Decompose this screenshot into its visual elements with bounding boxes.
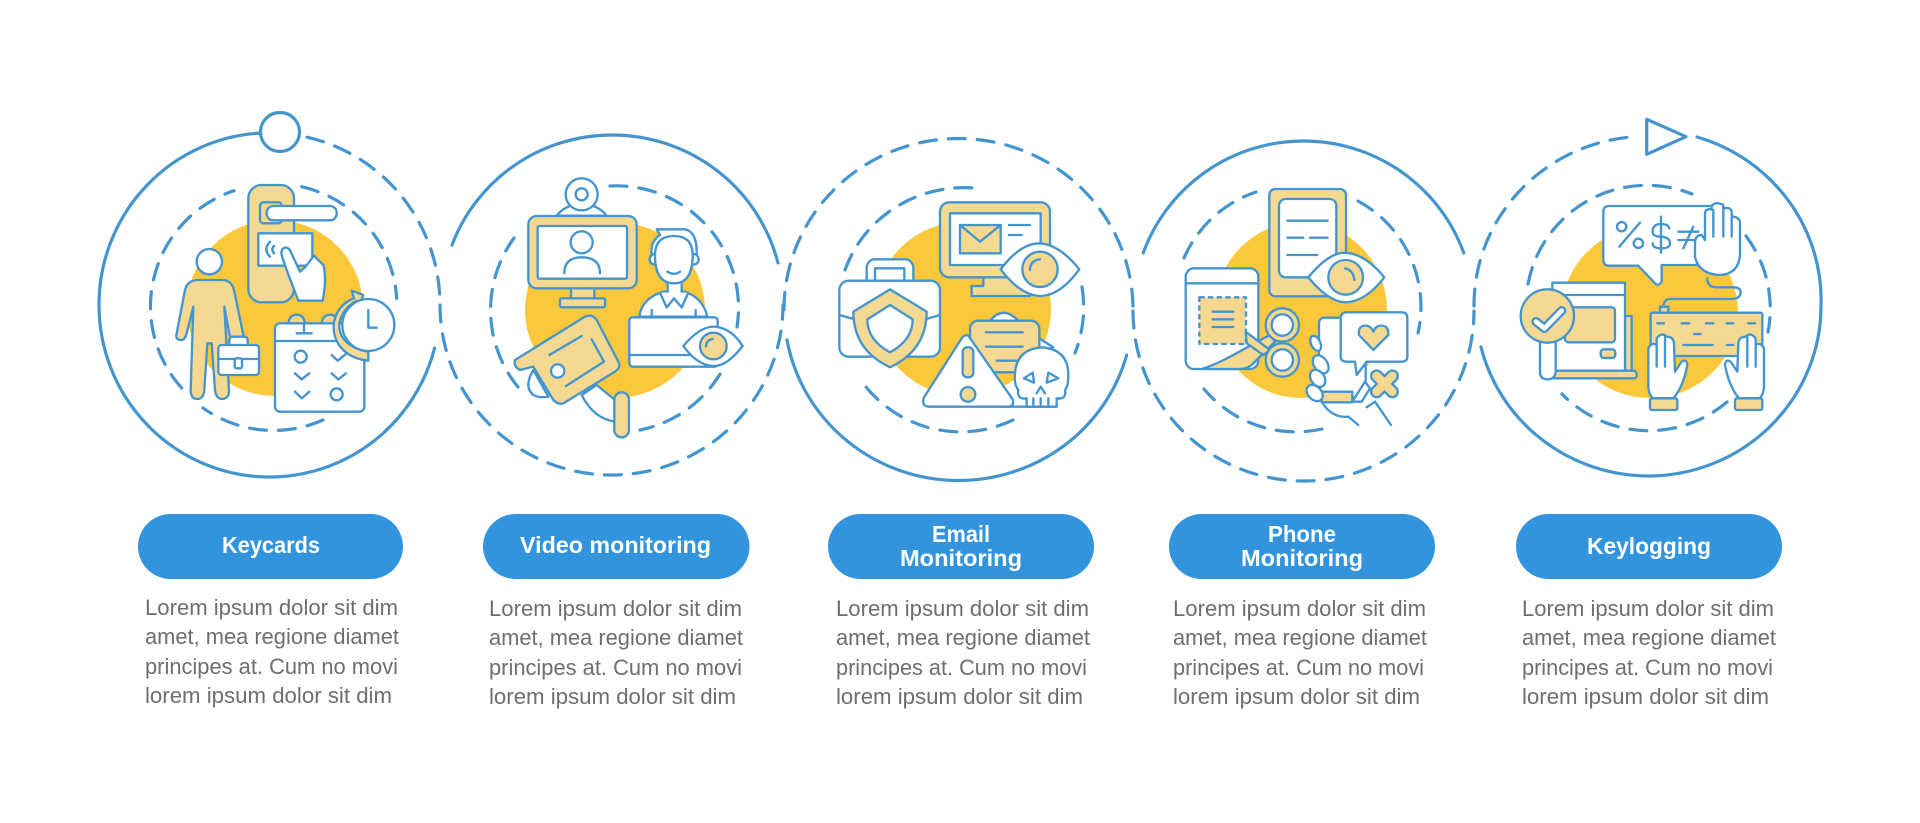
text block: amet, mea regione diamet: [1522, 625, 1776, 650]
door plate: [248, 185, 337, 302]
text block: principes at. Cum no movi: [489, 655, 742, 680]
outer ring: [1133, 141, 1474, 481]
laptop: [629, 317, 718, 367]
briefcase: [218, 337, 259, 375]
pill: Video monitoring: [483, 514, 750, 579]
verified badge: [1521, 289, 1574, 379]
text block: principes at. Cum no movi: [1173, 655, 1424, 680]
text block: principes at. Cum no movi: [145, 654, 398, 679]
text block: Lorem ipsum dolor sit dim: [1173, 596, 1426, 621]
text block: amet, mea regione diamet: [1173, 625, 1427, 650]
panel: Phone Monitoring: [1133, 141, 1474, 709]
security camera: [515, 316, 629, 437]
scissors: [1202, 308, 1299, 377]
inner dashed ring: [150, 187, 397, 430]
text block: amet, mea regione diamet: [489, 625, 743, 650]
cross flower: [1367, 376, 1392, 425]
hand holding phone: [1303, 318, 1370, 425]
document: [1186, 268, 1258, 369]
text block: lorem ipsum dolor sit dim: [1173, 684, 1420, 709]
text block: principes at. Cum no movi: [836, 655, 1087, 680]
briefcase with shield: [839, 259, 940, 367]
clock with arrow: [334, 291, 394, 361]
text block: amet, mea regione diamet: [145, 624, 399, 649]
webcam: [557, 178, 607, 216]
pill: Phone Monitoring: Monitoring: [1241, 545, 1363, 571]
raised hand: [1695, 203, 1740, 275]
icon: email, shield, warning: [839, 202, 1079, 407]
inner dashed ring: [491, 186, 739, 430]
outer ring: [440, 135, 783, 475]
calendar: [275, 315, 364, 412]
text block: Lorem ipsum dolor sit dim: [489, 596, 742, 621]
speech bubble with symbols: [1603, 206, 1717, 285]
panel: Email Monitoring: [784, 138, 1133, 709]
pill: Phone Monitoring: Phone: [1268, 521, 1336, 547]
person: [176, 249, 243, 399]
text block: Lorem ipsum dolor sit dim: [1522, 596, 1774, 621]
pill: Phone Monitoring: [1169, 514, 1435, 579]
yellow disc: [187, 220, 363, 396]
keyboard: [1651, 307, 1762, 356]
yellow disc: [1215, 222, 1387, 398]
text block: lorem ipsum dolor sit dim: [1522, 684, 1769, 709]
skull: [1007, 347, 1068, 407]
yellow disc: [525, 222, 705, 398]
icon: keylogging: [1521, 203, 1764, 410]
pill: Email Monitoring: Email: [932, 521, 990, 547]
pill: Email Monitoring: Monitoring: [900, 545, 1022, 571]
icon: phone, document, scissors: [1186, 189, 1407, 425]
text block: [1522, 596, 1776, 709]
outer ring: [99, 133, 440, 477]
text block: amet, mea regione diamet: [836, 625, 1090, 650]
eye: [1308, 253, 1384, 302]
eye: [1001, 243, 1079, 296]
text block: [145, 595, 399, 708]
laptop window: [1552, 283, 1637, 378]
panel: Keylogging: [1474, 119, 1821, 709]
pill: Email Monitoring: [828, 514, 1094, 579]
pill: Keycards: [138, 514, 403, 579]
right hand: [1725, 335, 1764, 410]
text block: lorem ipsum dolor sit dim: [145, 683, 392, 708]
text block: lorem ipsum dolor sit dim: [836, 684, 1083, 709]
start marker circle: [260, 112, 300, 152]
text block: [836, 596, 1090, 709]
text block: Lorem ipsum dolor sit dim: [836, 596, 1089, 621]
text block: Lorem ipsum dolor sit dim: [145, 595, 398, 620]
cable: [1663, 278, 1741, 307]
panel: Video monitoring: [440, 135, 783, 709]
speech bubble with heart: [1341, 312, 1407, 375]
yellow disc: [1562, 226, 1738, 398]
pill: Keycards: Keycards: [222, 532, 320, 558]
icon: keycard door, person, calendar: [176, 185, 394, 412]
warning triangle: [923, 335, 1013, 407]
pill: Video monitoring: Video monitoring: [520, 532, 711, 558]
monitor: [528, 216, 637, 307]
outer ring: [784, 138, 1133, 480]
eye: [683, 327, 743, 366]
yellow disc: [875, 222, 1051, 396]
pill: Keylogging: [1516, 514, 1782, 579]
text block: principes at. Cum no movi: [1522, 655, 1773, 680]
inner dashed ring: [845, 188, 1084, 432]
inner dashed ring: [1528, 185, 1770, 431]
icon: video call, camera, person: [515, 178, 743, 437]
tablet: [1269, 189, 1346, 296]
man: [639, 229, 707, 317]
outer ring: [1474, 137, 1821, 476]
left hand: [1648, 335, 1687, 410]
text block: [489, 596, 743, 709]
pill: Keylogging: Keylogging: [1587, 533, 1711, 559]
inner dashed ring: [1184, 192, 1421, 432]
monitor with envelope: [940, 202, 1050, 296]
text block: [1173, 596, 1427, 709]
clipboard: [970, 313, 1053, 372]
end marker triangle: [1647, 119, 1686, 154]
text block: lorem ipsum dolor sit dim: [489, 684, 736, 709]
panel: Keycards: [99, 112, 440, 708]
